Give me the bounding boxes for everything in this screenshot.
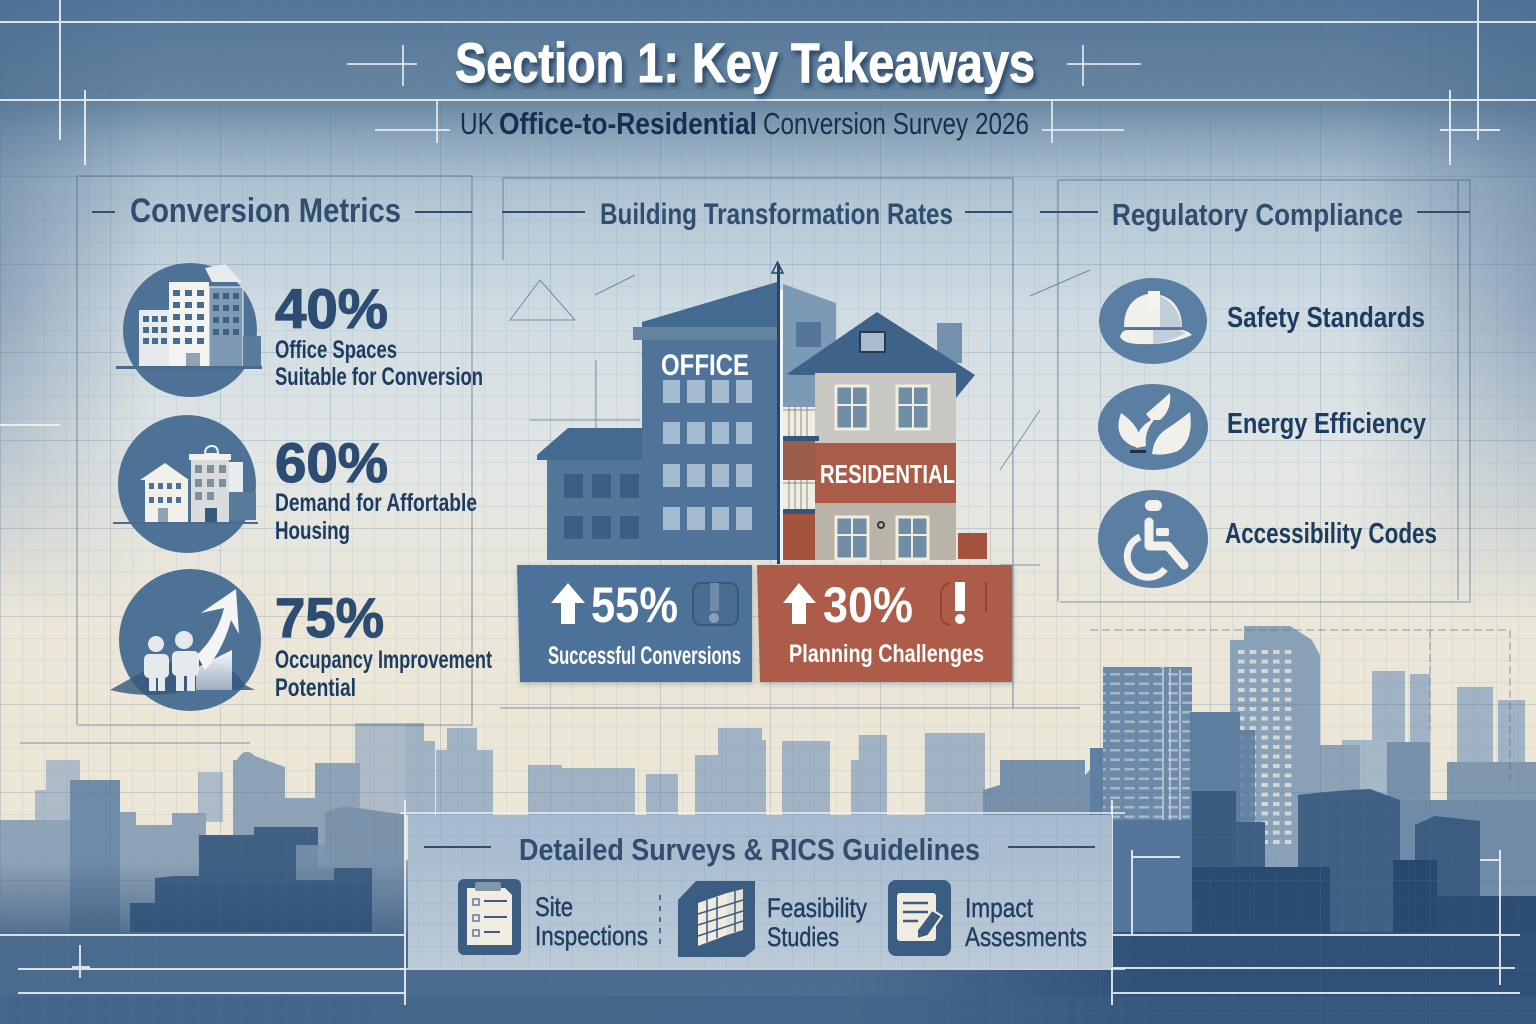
- office building: [537, 282, 778, 560]
- label: Studies: [767, 922, 839, 952]
- metric: 60%: [113, 415, 477, 553]
- label: Planning Challenges: [789, 640, 984, 668]
- label: [275, 336, 483, 391]
- item: energy efficiency: [1098, 384, 1426, 470]
- stat panel: planning challenges: [757, 565, 1012, 682]
- icon: floor plan: [678, 881, 755, 957]
- label: [965, 893, 1087, 952]
- label: Site: [535, 892, 573, 922]
- residential building: [783, 284, 987, 560]
- panel: detailed surveys and RICS guidelines: [400, 813, 1125, 969]
- title: Section 1: Key Takeaways: [455, 31, 1035, 94]
- item: impact assessments: [888, 880, 1087, 956]
- office label: OFFICE: [661, 349, 749, 382]
- icon: office buildings: [116, 263, 262, 397]
- item: safety standards: [1099, 278, 1425, 364]
- label: Successful Conversions: [548, 642, 741, 670]
- icon: alert: [941, 582, 986, 625]
- icon: alert: [693, 583, 738, 625]
- residential label: RESIDENTIAL: [820, 459, 955, 489]
- metric: 75%: [110, 569, 492, 711]
- label: Impact: [965, 893, 1033, 923]
- label: [767, 893, 867, 952]
- label: Suitable for Conversion: [275, 363, 483, 391]
- label: Inspections: [535, 921, 648, 951]
- city skyline: [0, 626, 1536, 1024]
- stat panel: successful conversions: [517, 565, 752, 682]
- subtitle: [460, 106, 1029, 141]
- icon: leaves: [1098, 384, 1208, 470]
- icon: wheelchair: [1098, 490, 1208, 588]
- label: Safety Standards: [1227, 302, 1425, 334]
- label: Assesments: [965, 922, 1087, 952]
- label: Potential: [275, 674, 356, 702]
- item: site inspections: [458, 879, 648, 955]
- heading: Conversion Metrics: Conversion Metrics: [130, 192, 401, 230]
- icon: document with pen: [888, 880, 951, 956]
- label: [535, 892, 648, 951]
- icon: hard hat: [1099, 278, 1207, 364]
- icon: up arrow: [783, 583, 816, 624]
- value: 30%: [823, 577, 913, 633]
- label: Housing: [275, 517, 350, 545]
- heading: Building Transformation Rates: Building Transformation Rates: [600, 198, 953, 231]
- label: Demand for Affortable: [275, 489, 477, 517]
- label: Accessibility Codes: [1225, 518, 1437, 550]
- value: 75%: [275, 586, 384, 649]
- item: feasibility studies: [678, 881, 867, 957]
- metric: 40%: [116, 263, 483, 397]
- icon: clipboard: [458, 879, 521, 955]
- title: [347, 31, 1141, 143]
- label: [275, 646, 492, 702]
- value: 40%: [275, 277, 388, 340]
- icon: up arrow: [551, 583, 585, 624]
- label: Energy Efficiency: [1227, 408, 1426, 440]
- panel heading: Detailed Surveys & RICS Guidelines: [519, 832, 980, 867]
- label: [275, 489, 477, 545]
- value: 60%: [275, 431, 388, 494]
- subtitle: UK: [460, 106, 494, 141]
- icon: housing: [113, 415, 258, 553]
- label: Occupancy Improvement: [275, 646, 492, 674]
- label: Feasibility: [767, 893, 867, 923]
- heading: Regulatory Compliance: Regulatory Compliance: [1112, 197, 1403, 232]
- value: 55%: [591, 577, 678, 633]
- subtitle: Conversion Survey 2026: [763, 106, 1029, 141]
- label: Office Spaces: [275, 336, 397, 364]
- subtitle: Office-to-Residential: [499, 106, 757, 141]
- illustration: office to residential building: [537, 262, 987, 564]
- icon: occupancy growth: [110, 569, 261, 711]
- item: accessibility codes: [1098, 490, 1437, 588]
